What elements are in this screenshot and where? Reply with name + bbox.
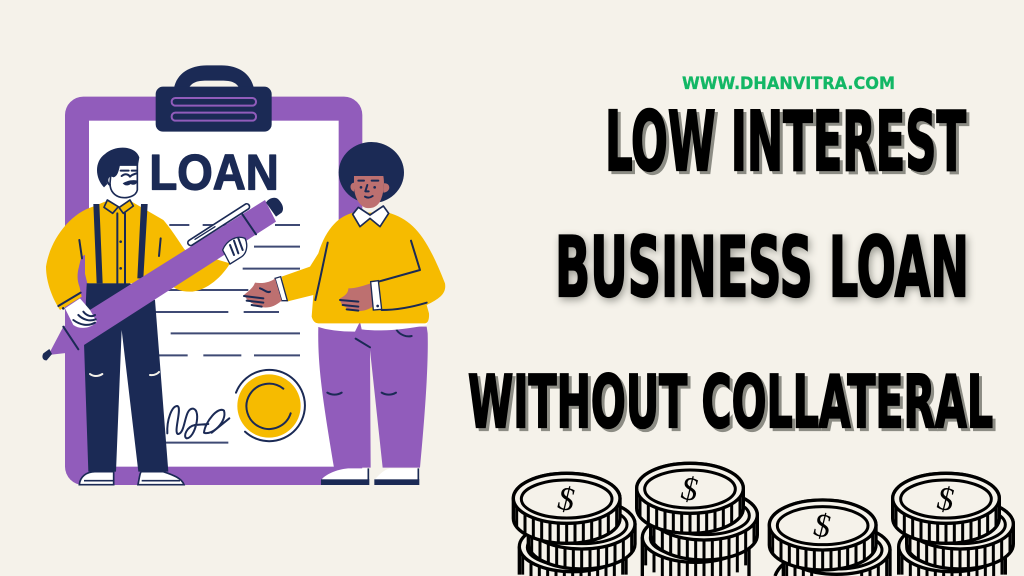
person figure xyxy=(244,142,445,485)
man belt xyxy=(87,283,130,303)
clip plate xyxy=(156,87,272,132)
person sweater lines xyxy=(315,241,427,310)
coin stack 4: $ xyxy=(933,479,958,519)
man trousers xyxy=(84,283,168,472)
paper text lines xyxy=(155,225,300,443)
person sweater xyxy=(282,213,445,323)
person right cuff xyxy=(371,281,382,310)
man shirt xyxy=(85,202,185,283)
coin stack 2: $ xyxy=(677,469,702,509)
man knee marks xyxy=(90,372,159,376)
man figure xyxy=(42,148,283,485)
person collar xyxy=(353,206,389,227)
man face xyxy=(110,165,137,198)
paper sheet xyxy=(89,121,339,467)
coin stacks xyxy=(513,463,1013,576)
man moustache and glasses xyxy=(123,180,137,185)
clipboard board xyxy=(65,97,362,485)
pen cap end xyxy=(266,198,283,217)
man right sleeve xyxy=(130,227,230,292)
person ears xyxy=(350,183,389,193)
man suspenders xyxy=(93,204,148,283)
coin stack 3 xyxy=(769,500,890,576)
pen xyxy=(42,198,283,360)
man hair xyxy=(97,148,139,187)
man hand on left xyxy=(58,293,97,328)
coin stack 3: $ xyxy=(810,506,835,546)
person facial features xyxy=(358,181,378,198)
person trouser details xyxy=(327,330,412,395)
LOAN heading: LOAN xyxy=(149,144,279,200)
pen bands xyxy=(63,213,256,349)
website url: WWW.DHANVITRA.COM xyxy=(682,74,895,93)
person face xyxy=(354,176,384,208)
coin stack 4 xyxy=(893,473,1013,576)
man ear xyxy=(107,176,113,185)
person shoes xyxy=(321,468,419,485)
person undershirt xyxy=(317,318,428,332)
man hand on pen xyxy=(223,237,247,264)
stamp seal xyxy=(236,370,305,441)
man left arm xyxy=(46,207,93,310)
coin stack 1: $ xyxy=(554,479,579,519)
clipboard gap crescent xyxy=(78,260,87,295)
signature xyxy=(167,406,229,438)
pen clip xyxy=(191,207,247,243)
person left cuff xyxy=(275,277,287,301)
pen nib xyxy=(42,349,52,360)
person right hand xyxy=(340,283,373,311)
person hair xyxy=(339,142,404,203)
man neck xyxy=(108,187,131,208)
person trousers xyxy=(318,327,428,468)
coin stack 2 xyxy=(637,463,757,576)
illustration: loan clipboard with two people xyxy=(42,65,445,485)
man collar xyxy=(104,200,133,213)
clip handle xyxy=(174,65,254,88)
coin stack 1 xyxy=(513,473,635,576)
man shirt details xyxy=(79,213,161,283)
man shoes xyxy=(79,472,184,485)
person left hand xyxy=(244,278,282,308)
